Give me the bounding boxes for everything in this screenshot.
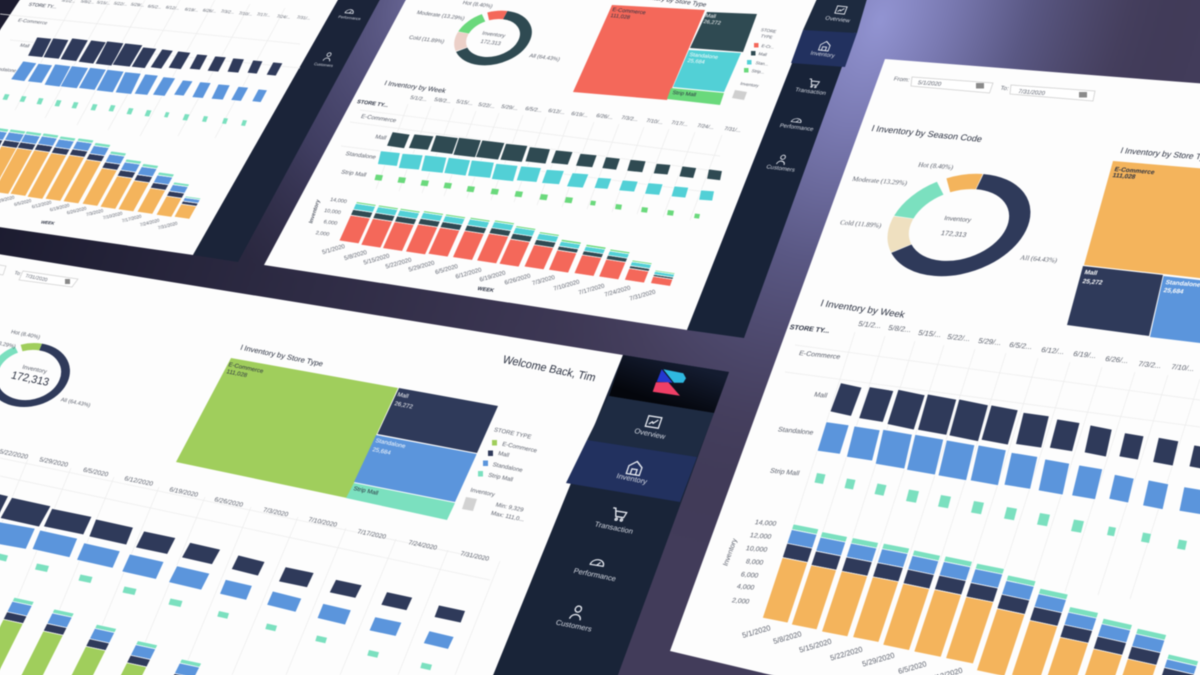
stacked bar chart — [339, 202, 675, 286]
week headers: 7/3/2020 — [262, 507, 290, 518]
nav label: customers: Customers — [555, 618, 594, 634]
row labels: Standalone — [777, 427, 814, 437]
heatmap row: mall — [0, 487, 466, 623]
heatmap row: strip mall — [374, 174, 700, 219]
week headers: 7/10/... — [645, 118, 664, 126]
x-axis dates: 7/3/2020 — [532, 275, 556, 287]
x-axis dates: 5/1/2020 — [741, 623, 772, 640]
nav label: customers: Customers — [765, 165, 796, 174]
row labels — [0, 2, 58, 74]
x-axis dates — [322, 244, 657, 303]
donut: season code: 172,313 — [479, 39, 502, 47]
week headers: 5/15/... — [917, 328, 943, 339]
treemap: Mall — [1083, 269, 1099, 277]
panel: bottom-left dashboard (green) — [0, 253, 729, 675]
week headers: 6/26/... — [595, 113, 614, 121]
heatmap row: strip mall — [814, 473, 1187, 550]
legend: Mall — [497, 451, 510, 459]
axis title: WEEK — [40, 220, 56, 226]
week headers: 7/17/... — [256, 12, 272, 18]
week headers — [857, 319, 1196, 373]
x-axis dates: 5/29/2020 — [408, 260, 436, 274]
y-axis labels — [722, 519, 777, 606]
week headers: 6/5/2... — [1008, 340, 1034, 351]
y-axis labels: 2,000 — [731, 598, 750, 606]
x-axis dates: 7/17/2020 — [578, 283, 606, 297]
nav label: overview: Overview — [633, 426, 667, 441]
row labels: Mall — [18, 43, 31, 49]
date filter: from: 5/1/2020 — [917, 80, 943, 88]
x-axis dates: 6/19/2020 — [479, 270, 507, 284]
x-axis dates: 7/3/2020 — [86, 208, 104, 217]
heading: welcome: Welcome Back, Tim — [501, 354, 597, 384]
row labels: Mall — [374, 135, 387, 142]
week headers: 7/24/... — [276, 14, 292, 20]
legend: Mall — [758, 51, 768, 57]
week headers: 6/19/... — [570, 111, 589, 119]
donut: season code: 172,313 — [9, 369, 51, 389]
date filter: to — [999, 85, 1095, 101]
week headers: 6/19/2020 — [168, 486, 199, 499]
treemap: Strip Mall — [671, 90, 697, 98]
heading: store type: l Inventory by Store Type — [239, 343, 325, 368]
donut: season code: Inventory — [21, 365, 48, 375]
donut: season code: Inventory — [943, 215, 973, 224]
week headers: 5/22/... — [946, 332, 972, 343]
nav label: transaction: Transaction — [794, 87, 827, 97]
x-axis dates: 7/10/2020 — [102, 211, 123, 220]
legend: STORE — [760, 27, 777, 34]
heatmap row: strip mall — [0, 553, 432, 670]
date filter: to: 7/31/2020 — [1017, 89, 1046, 97]
date filter — [0, 262, 78, 287]
nav label: overview: Overview — [824, 16, 851, 24]
row labels: Mall — [813, 392, 829, 400]
row labels: Standalone — [344, 151, 377, 161]
treemap: Standalone — [374, 438, 407, 450]
treemap: 111,028 — [609, 13, 631, 21]
week headers: 5/29/... — [977, 336, 1003, 347]
heatmap row: standalone — [0, 521, 454, 649]
row labels: E-Commerce — [798, 350, 841, 361]
week headers: 5/22/... — [113, 1, 129, 7]
legend: E-Commerce — [501, 442, 538, 455]
x-axis dates: 6/12/2020 — [455, 267, 483, 281]
week headers: 6/19/... — [184, 7, 200, 13]
week headers: 5/1/2... — [857, 319, 883, 330]
icon: performance — [791, 118, 802, 123]
logo block — [609, 355, 729, 413]
x-axis dates: 5/8/2020 — [772, 629, 803, 646]
date filter: 7/31/2020 — [24, 273, 48, 283]
donut: season code: 172,313 — [940, 230, 967, 239]
week headers: 5/22/... — [477, 102, 496, 110]
x-axis dates: 6/26/2020 — [66, 206, 87, 215]
legend: Inventory — [469, 488, 496, 498]
y-axis labels — [308, 197, 348, 238]
treemap: 25,684 — [1162, 287, 1185, 295]
icon: transaction — [609, 508, 628, 521]
legend: E-Cr... — [761, 43, 775, 50]
x-axis dates — [0, 195, 178, 230]
donut: season code: Hot (8.40%) — [917, 161, 955, 171]
icon: performance — [345, 9, 355, 13]
y-axis labels: 6,000 — [323, 219, 338, 227]
x-axis dates: 6/26/2020 — [504, 273, 532, 287]
sidebar — [490, 355, 729, 675]
treemap — [1067, 161, 1200, 344]
week headers: 7/10/2020 — [307, 516, 338, 529]
treemap: 26,272 — [702, 19, 721, 27]
week headers: 6/5/2... — [524, 106, 543, 114]
x-axis dates: 5/22/2020 — [829, 645, 864, 663]
donut: season code: Inventory — [481, 31, 506, 39]
week headers: 5/29/... — [130, 2, 146, 8]
x-axis dates: 7/10/2020 — [553, 279, 581, 293]
treemap: E-Commerce — [1113, 166, 1156, 176]
week headers: 7/3/2... — [620, 115, 639, 123]
x-axis dates: 5/1/2020 — [322, 244, 346, 256]
y-axis labels: 12,000 — [749, 532, 772, 541]
week headers: 7/31/... — [296, 15, 312, 21]
heatmap row: mall — [830, 383, 1200, 470]
treemap: 25,272 — [1081, 278, 1104, 286]
week headers: 7/24/... — [696, 123, 715, 131]
week headers: 6/12/... — [1040, 345, 1066, 356]
nav label: transaction: Transaction — [593, 520, 635, 536]
heatmap row: strip mall — [2, 94, 247, 126]
sidebar — [193, 0, 384, 262]
heatmap row: mall — [386, 132, 722, 181]
x-axis dates: 7/17/2020 — [121, 214, 142, 223]
nav label: inventory: Inventory — [809, 51, 836, 59]
heatmap row: mall — [28, 37, 283, 76]
date filter: to: To: — [999, 86, 1010, 92]
week headers: 6/19/... — [1072, 349, 1098, 360]
treemap: 26,272 — [393, 401, 414, 411]
y-axis labels: 10,000 — [323, 208, 342, 216]
treemap: E-Commerce — [611, 7, 646, 16]
donut: season code: All (64.43%) — [1019, 254, 1059, 264]
week headers: 5/29/2020 — [38, 456, 69, 469]
week headers: 6/12/... — [547, 108, 566, 116]
treemap — [573, 5, 757, 105]
x-axis dates — [741, 623, 964, 675]
axis title: WEEK — [476, 286, 495, 294]
week headers: 6/5/2020 — [82, 467, 110, 478]
week headers: 5/1/2... — [409, 95, 428, 103]
row labels — [769, 324, 841, 477]
x-axis dates: 7/24/2020 — [139, 218, 160, 227]
heatmap row: standalone — [10, 61, 268, 102]
date filter: To: — [13, 270, 22, 277]
legend: Standalone — [491, 462, 524, 474]
icon: customers — [570, 605, 585, 620]
treemap: Mall — [396, 392, 409, 400]
x-axis dates: 5/15/2020 — [798, 637, 833, 655]
icon: overview — [835, 6, 847, 14]
nav label: customers: Customers — [313, 61, 334, 68]
treemap: Mall — [704, 13, 717, 20]
week headers: 7/31/... — [723, 126, 742, 134]
y-axis labels: 2,000 — [315, 230, 330, 238]
x-axis dates: 6/12/2020 — [31, 200, 52, 209]
week headers: 5/15/... — [455, 99, 474, 107]
x-axis dates: 7/24/2020 — [604, 285, 632, 299]
week headers: 7/3/2... — [220, 9, 236, 15]
x-axis dates: 5/15/2020 — [363, 253, 391, 267]
donut: season code: All (64.43%) — [528, 53, 561, 63]
donut: season code: Moderate (13.29%) — [851, 175, 909, 187]
heatmap row: standalone — [377, 151, 714, 201]
icon: overview — [645, 416, 662, 428]
donut: season code: Cold (11.89%) — [408, 35, 445, 45]
x-axis dates: 7/31/2020 — [157, 221, 178, 230]
y-axis labels: 8,000 — [745, 559, 764, 567]
x-axis dates: 6/5/2020 — [14, 198, 32, 207]
x-axis dates: 5/29/2020 — [861, 651, 896, 669]
x-axis dates: 5/22/2020 — [385, 257, 413, 271]
nav label: performance: Performance — [337, 14, 362, 21]
week headers: 6/12/... — [165, 5, 181, 11]
week headers: 7/10/... — [1170, 362, 1196, 373]
week headers: 6/26/... — [1104, 354, 1130, 365]
legend: STORE TYPE — [493, 428, 532, 441]
heading: inventory by week: l Inventory by Week — [819, 299, 907, 321]
treemap: 25,684 — [686, 58, 705, 66]
week headers: 7/24/2020 — [407, 539, 438, 552]
heading: inventory by week: l Inventory by Week — [383, 80, 447, 95]
row labels — [340, 99, 398, 178]
row labels: E-Commerce — [360, 114, 398, 124]
legend: Strip... — [751, 68, 766, 75]
stacked bar chart — [0, 127, 201, 219]
y-axis labels: Inventory — [308, 198, 322, 224]
y-axis labels: 14,000 — [329, 197, 348, 205]
panel: top-middle dashboard (red) — [264, 0, 869, 338]
treemap: 25,684 — [371, 447, 392, 457]
donut: season code — [0, 329, 91, 409]
y-axis labels: 10,000 — [745, 545, 768, 554]
panel: right dashboard (orange) — [670, 59, 1200, 675]
legend: Inventory — [739, 81, 761, 88]
week headers: 7/3/2... — [1137, 359, 1163, 370]
nav label: inventory: Inventory — [615, 471, 649, 486]
legend — [732, 27, 777, 100]
x-axis dates: 5/8/2020 — [344, 250, 368, 262]
row labels: STORE TY... — [27, 2, 58, 10]
x-axis dates: 6/19/2020 — [49, 203, 70, 212]
treemap: Standalone — [688, 52, 719, 61]
week headers: 7/17/2020 — [356, 528, 387, 541]
treemap — [176, 358, 498, 520]
icon: customers — [776, 155, 788, 165]
stacked bar chart — [0, 597, 202, 675]
donut: season code: Hot (8.40%) — [10, 329, 41, 341]
week headers: 5/8/2... — [887, 323, 913, 334]
row labels: STORE TY... — [788, 324, 831, 335]
week headers: 5/29/... — [500, 104, 519, 112]
week headers: 6/5/2... — [147, 4, 163, 10]
donut: season code: Cold (11.89%) — [839, 219, 883, 230]
heading: season code: l Inventory by Season Code — [870, 124, 984, 144]
y-axis labels: 6,000 — [740, 572, 759, 580]
week headers: 6/26/2020 — [213, 496, 244, 509]
row labels: E-Commerce — [16, 18, 49, 26]
row labels: STORE TY... — [356, 99, 390, 109]
treemap: Strip Mall — [352, 486, 379, 497]
donut: season code: Hot (8.40%) — [461, 0, 494, 10]
week headers — [0, 448, 490, 563]
donut: season code — [839, 161, 1059, 273]
y-axis labels: Inventory — [722, 537, 739, 567]
x-axis dates: 6/5/2020 — [435, 264, 459, 276]
heatmap row: standalone — [817, 422, 1200, 515]
icon: performance — [590, 559, 605, 566]
sidebar — [687, 0, 869, 338]
nav label: performance: Performance — [572, 566, 618, 583]
week headers: 6/12/2020 — [123, 475, 154, 488]
panel: top-left dashboard (orange) — [0, 0, 384, 262]
legend: Max: 111,0... — [490, 511, 525, 523]
treemap: E-Commerce — [227, 362, 265, 375]
x-axis dates: 7/31/2020 — [629, 289, 657, 303]
icon: transaction — [807, 79, 820, 88]
nav label: performance: Performance — [778, 123, 814, 133]
stacked bar chart — [762, 524, 1199, 675]
legend: Stan... — [755, 60, 770, 67]
week headers: 7/10/... — [238, 11, 254, 17]
date filter: from: From: — [893, 77, 911, 84]
week headers: 7/31/2020 — [459, 550, 490, 563]
legend: Min: 9,329 — [495, 502, 525, 514]
date filter: from — [893, 77, 993, 93]
icon: inventory — [818, 41, 832, 51]
y-axis labels: 14,000 — [754, 519, 777, 528]
nav active: inventory — [791, 30, 857, 67]
treemap: 111,028 — [225, 369, 248, 379]
week headers: 5/8/2... — [433, 97, 452, 105]
nav active: inventory — [566, 440, 697, 502]
week headers — [409, 95, 742, 134]
legend: Strip Mall — [487, 473, 514, 483]
treemap: 111,028 — [1111, 172, 1137, 181]
week headers: 7/17/... — [670, 120, 689, 128]
donut: season code: All (64.43%) — [60, 397, 91, 409]
legend: TYPE — [760, 34, 774, 40]
row labels: Strip Mall — [769, 468, 801, 477]
week headers: 6/26/... — [202, 8, 218, 14]
row labels: Strip Mall — [340, 170, 367, 178]
legend — [462, 428, 538, 523]
y-axis labels: 4,000 — [736, 584, 755, 592]
icon: inventory — [626, 460, 644, 476]
week headers — [61, 0, 312, 21]
icon: customers — [323, 52, 333, 61]
donut: season code: Moderate (13.29%) — [415, 10, 465, 22]
donut: season code — [408, 0, 561, 65]
